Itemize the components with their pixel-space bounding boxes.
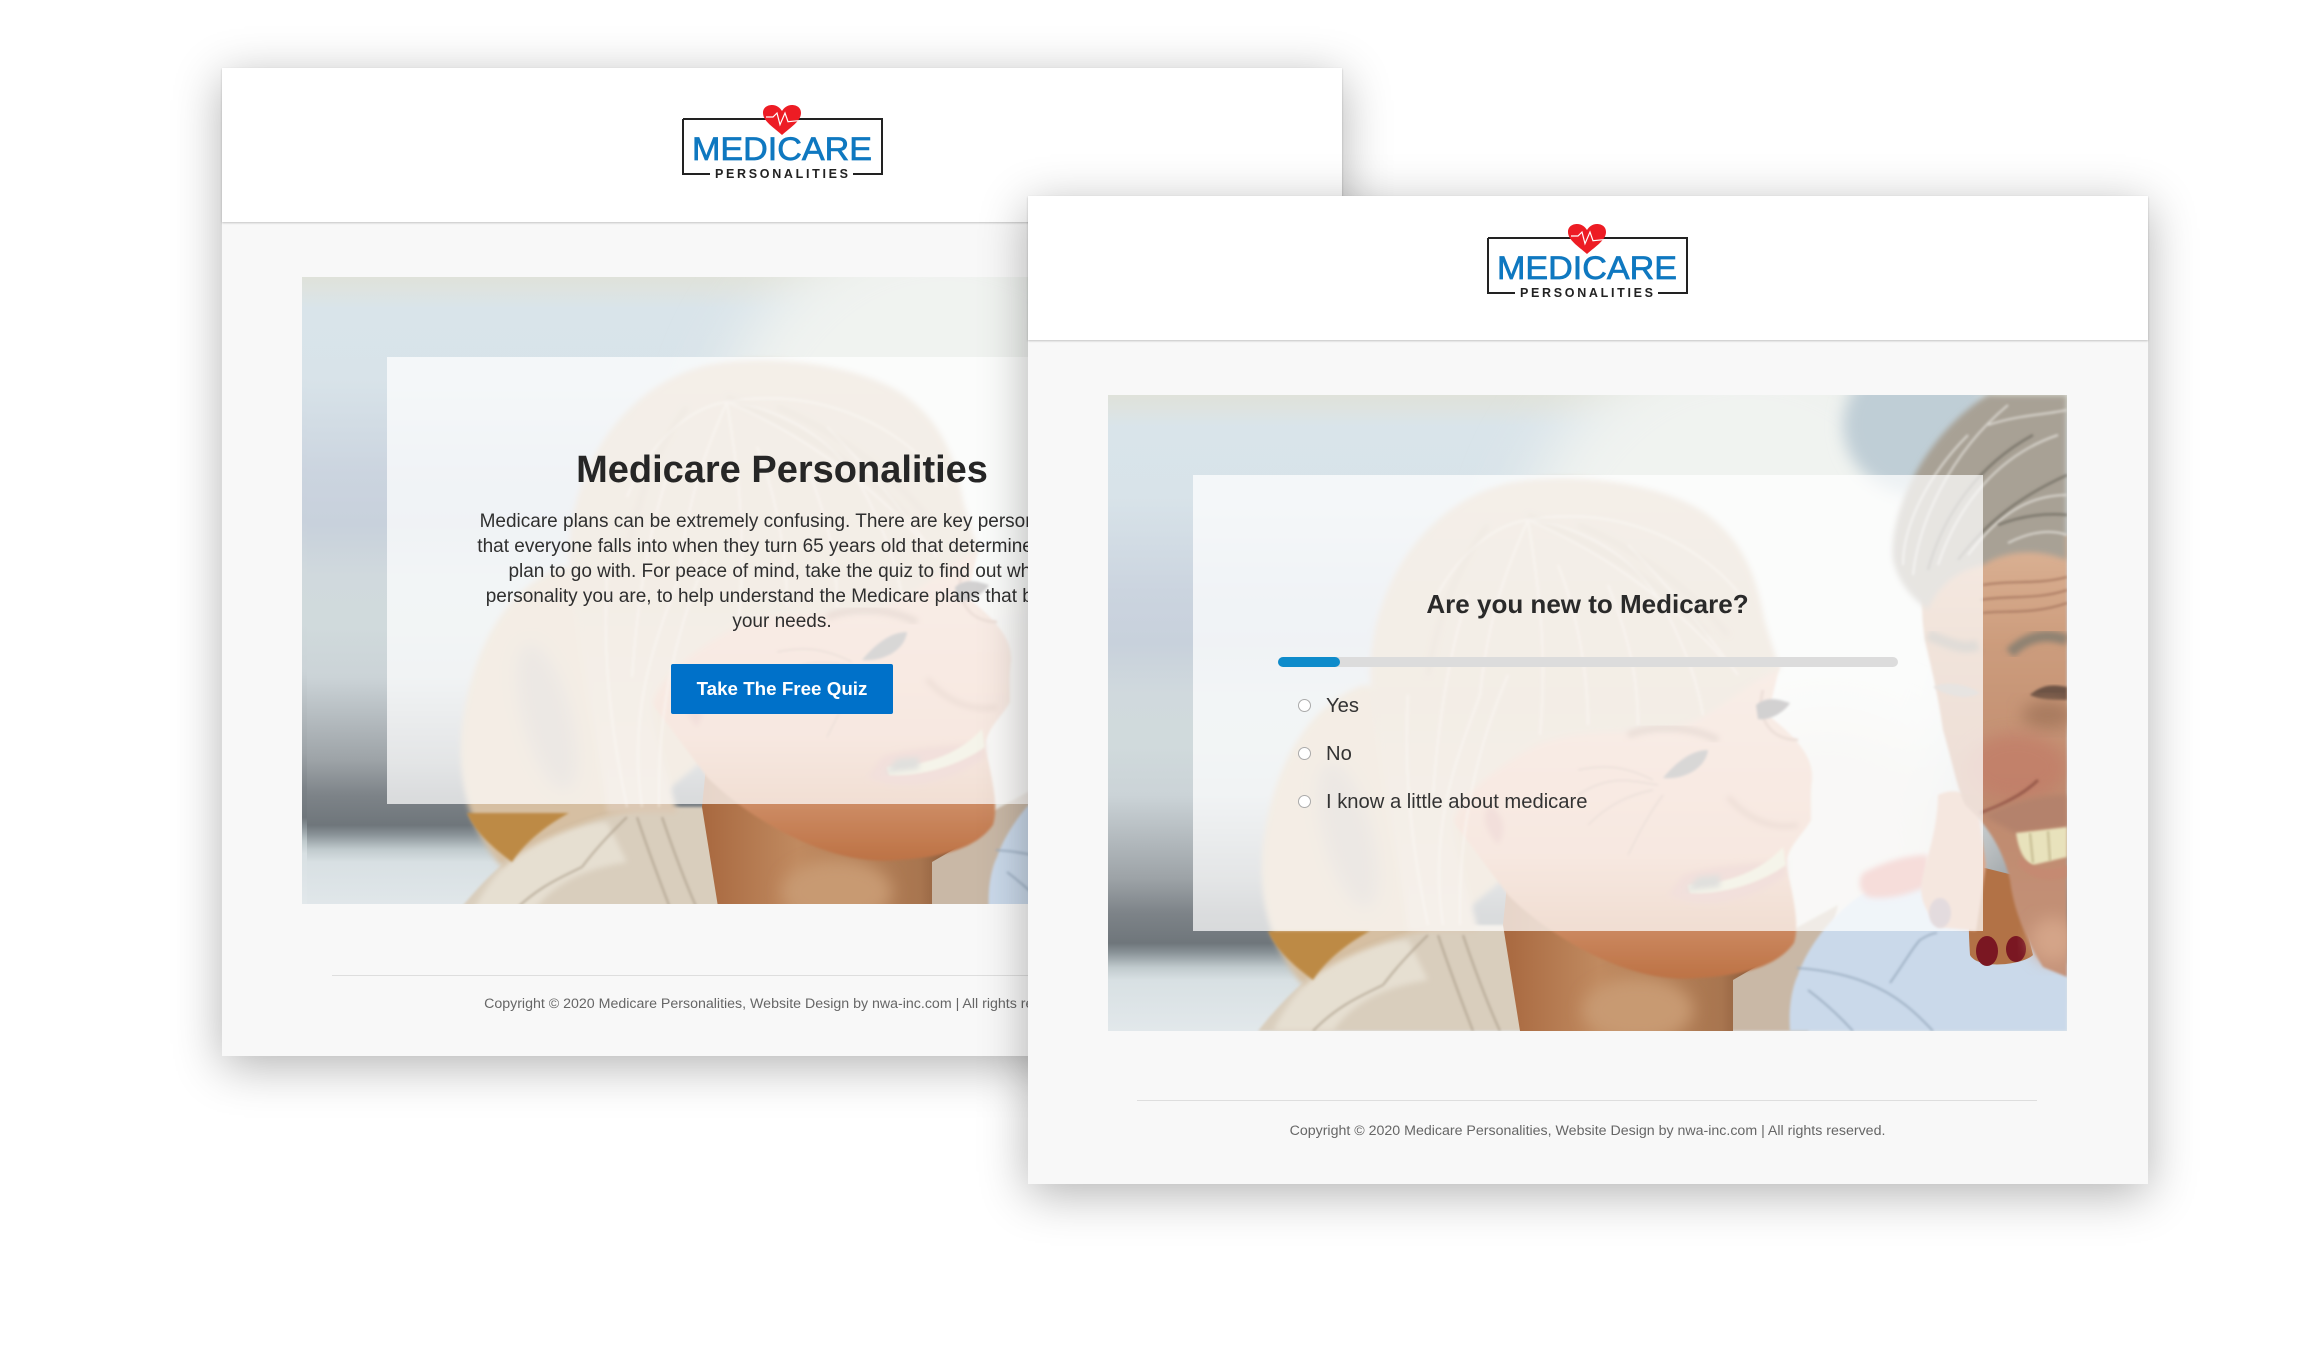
photo: senior couple, landing page: [302, 277, 1028, 904]
radio option: yes: [1298, 695, 1359, 717]
radio option: no: No: [1326, 743, 1352, 765]
header: landing page logo bar: [222, 68, 1342, 222]
logo: Medicare Personalities: MEDICARE: [692, 131, 872, 167]
translucent quiz panel: [1193, 475, 1983, 931]
text block: intro paragraph: personality you are, to help understand the Medicare plans that best fit: [486, 586, 1078, 607]
logo: Medicare Personalities: [682, 105, 883, 179]
radio option: no: [1298, 743, 1352, 765]
panel: landing page card: [222, 68, 1342, 1056]
button: take the free quiz: [671, 664, 893, 714]
footer copyright: Copyright © 2020 Medicare Personalities, Website Design by nwa-inc.com | All rights reserved.: [484, 996, 1080, 1012]
translucent content panel: [387, 357, 1175, 804]
header: quiz page logo bar: [1028, 196, 2148, 340]
text block: intro paragraph: that everyone falls into when they turn 65 years old that determine which: [477, 536, 1087, 557]
heading: Medicare Personalities: [576, 449, 988, 491]
progress bar: [1278, 657, 1898, 667]
logo: Medicare Personalities: [1487, 224, 1688, 298]
photo: senior couple, quiz page: [1108, 395, 2067, 1031]
footer copyright: Copyright © 2020 Medicare Personalities, Website Design by nwa-inc.com | All rights reserved.: [1290, 1123, 1885, 1139]
text block: intro paragraph: Medicare plans can be extremely confusing. There are key personalities: [480, 511, 1084, 532]
progress fill: [1278, 657, 1340, 667]
question heading: Are you new to Medicare?: [1426, 589, 1749, 619]
text block: intro paragraph: plan to go with. For peace of mind, take the quiz to find out which: [508, 561, 1056, 582]
radio option: yes: Yes: [1326, 695, 1359, 717]
radio option: a little: I know a little about medicare: [1326, 791, 1587, 813]
panel: quiz page card: [1028, 196, 2148, 1184]
button: take the free quiz: Take The Free Quiz: [697, 678, 867, 699]
text block: intro paragraph: your needs.: [732, 611, 832, 632]
text block: intro paragraph: [477, 511, 1087, 632]
logo: Medicare Personalities: MEDICARE: [1497, 250, 1677, 286]
